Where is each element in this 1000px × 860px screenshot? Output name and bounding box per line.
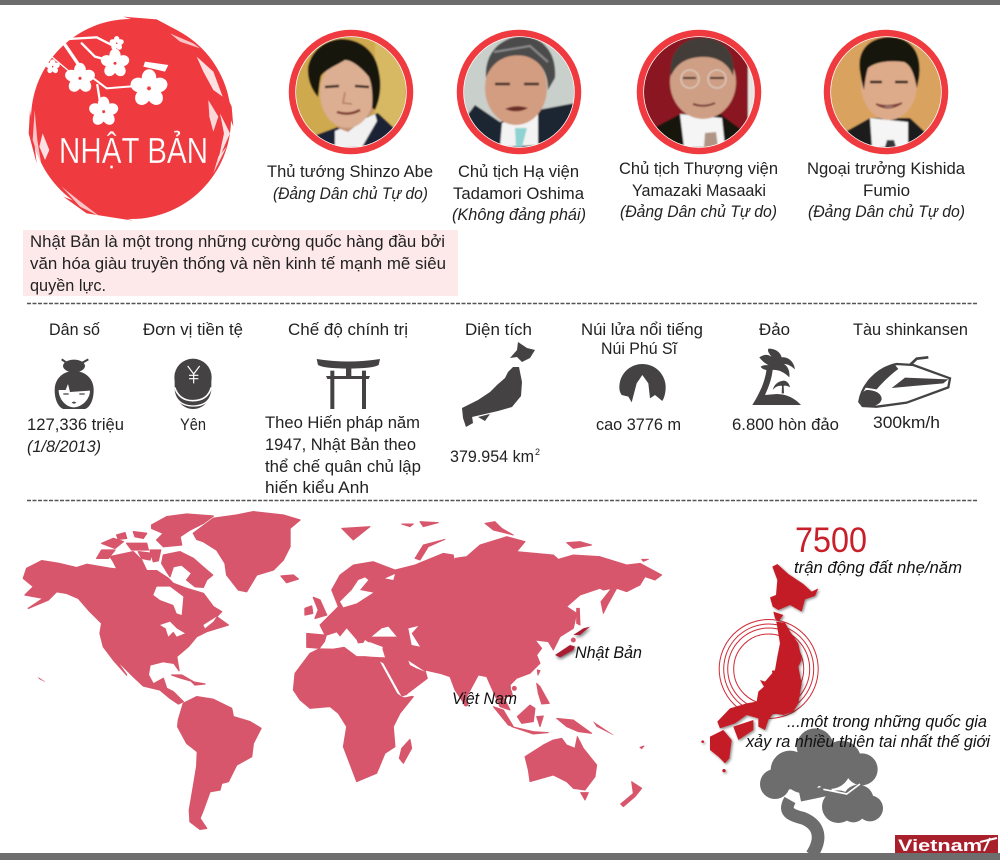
label: Vietnam: Việt Nam <box>452 690 517 708</box>
label: Japan: Nhật Bản <box>575 644 642 662</box>
portrait: Tadamori Oshima <box>460 30 585 155</box>
earthquake figure: trận động đất nhẹ/năm <box>794 559 962 577</box>
stat: currency <box>143 321 243 434</box>
icon: Mount Fuji <box>619 364 666 402</box>
stat: population: (1/8/2013) <box>27 438 101 456</box>
disaster caption: xảy ra nhiều thiên tai nhất thế giới <box>745 733 991 751</box>
earthquake rings <box>719 620 818 718</box>
caption: Yamazaki Masaaki <box>619 160 778 221</box>
intro text block <box>23 230 458 296</box>
caption: Tadamori Oshima: (Không đảng phái) <box>452 206 586 224</box>
bonsai tree <box>760 728 883 855</box>
stat: islands: 6.800 hòn đảo <box>732 416 839 434</box>
stat: political system: thể chế quân chủ lập <box>265 458 421 476</box>
intro text block: Nhật Bản là một trong những cường quốc hàng đầu bởi <box>30 233 445 251</box>
Japan highlighted on map <box>555 627 590 657</box>
caption: Tadamori Oshima: Tadamori Oshima <box>453 185 585 203</box>
stat: area: 2 <box>535 447 540 457</box>
caption: Shinzo Abe: Thủ tướng Shinzo Abe <box>267 163 433 181</box>
stat: area: Diện tích <box>465 321 532 339</box>
stat: volcano: Núi Phú Sĩ <box>601 340 678 358</box>
map of Japan <box>701 564 818 772</box>
caption: Kishida Fumio: (Đảng Dân chủ Tự do) <box>808 203 965 221</box>
caption: Yamazaki Masaaki: Yamazaki Masaaki <box>632 182 766 200</box>
logo: red sun with cherry blossom <box>29 17 233 221</box>
Americas and Greenland <box>23 512 327 829</box>
bottom bar <box>0 853 1000 860</box>
stat: shinkansen: Tàu shinkansen <box>853 321 968 339</box>
stat: currency: Yên <box>180 416 206 434</box>
icon: torii gate <box>317 359 380 409</box>
stat: population: Dân số <box>49 321 100 339</box>
caption: Yamazaki Masaaki: Chủ tịch Thượng viện <box>619 160 778 178</box>
stat: volcano: Núi lửa nổi tiếng <box>581 321 703 339</box>
Eurasia, Africa, Oceania <box>293 522 662 807</box>
world map <box>23 512 662 829</box>
icon: map of Japan <box>462 342 535 427</box>
stat: population <box>27 321 124 456</box>
stat: political system: Theo Hiến pháp năm <box>265 414 420 432</box>
inland seas <box>320 574 425 697</box>
stat: volcano <box>581 321 703 434</box>
caption: Shinzo Abe <box>267 163 433 203</box>
caption: Kishida Fumio <box>807 160 966 221</box>
marker: Vietnam <box>511 685 517 691</box>
top bar <box>0 0 1000 5</box>
portrait: Shinzo Abe <box>290 30 415 155</box>
intro text block: văn hóa giàu truyền thống và nền kinh tế mạnh mẽ siêu <box>30 255 446 273</box>
stat: currency: Đơn vị tiền tệ <box>143 321 243 339</box>
stat: shinkansen <box>853 321 968 432</box>
Vietnam+ logo: Vietnam <box>898 836 982 855</box>
caption: Shinzo Abe: (Đảng Dân chủ Tự do) <box>273 185 428 203</box>
stat: islands: Đảo <box>759 321 790 339</box>
logo title: NHẬT BẢN <box>59 130 208 171</box>
Vietnam+ logo <box>895 835 998 855</box>
marker: Japan <box>570 637 576 643</box>
caption: Kishida Fumio: Ngoại trưởng Kishida <box>807 160 966 178</box>
caption: Tadamori Oshima <box>452 163 586 224</box>
icon: bullet train <box>859 357 950 407</box>
stat: volcano: cao 3776 m <box>596 416 681 434</box>
portrait: Yamazaki Masaaki <box>640 30 765 155</box>
caption: Kishida Fumio: Fumio <box>863 182 910 200</box>
caption: Tadamori Oshima: Chủ tịch Hạ viện <box>458 163 579 181</box>
disaster caption: ...một trong những quốc gia <box>787 713 987 731</box>
stat: islands <box>732 321 839 434</box>
earthquake figure: 7500 <box>795 521 867 560</box>
stat: area <box>450 321 540 466</box>
stat: political system: 1947, Nhật Bản theo <box>265 436 416 454</box>
stat: political system: hiến kiểu Anh <box>265 479 369 497</box>
stat: shinkansen: 300km/h <box>873 414 940 432</box>
earthquake figure <box>794 521 962 577</box>
stat: political system <box>265 321 421 497</box>
portrait: Kishida Fumio <box>825 30 950 155</box>
icon: geisha <box>55 359 94 409</box>
stat: political system: Chế độ chính trị <box>288 321 408 339</box>
disaster caption <box>745 713 991 751</box>
stat: area: 379.954 km <box>450 448 534 466</box>
icon: yen coins <box>174 359 212 409</box>
caption: Yamazaki Masaaki: (Đảng Dân chủ Tự do) <box>620 203 777 221</box>
stat: population: 127,336 triệu <box>27 416 124 434</box>
icon: palm island <box>752 349 801 405</box>
intro text block: quyền lực. <box>30 277 106 295</box>
